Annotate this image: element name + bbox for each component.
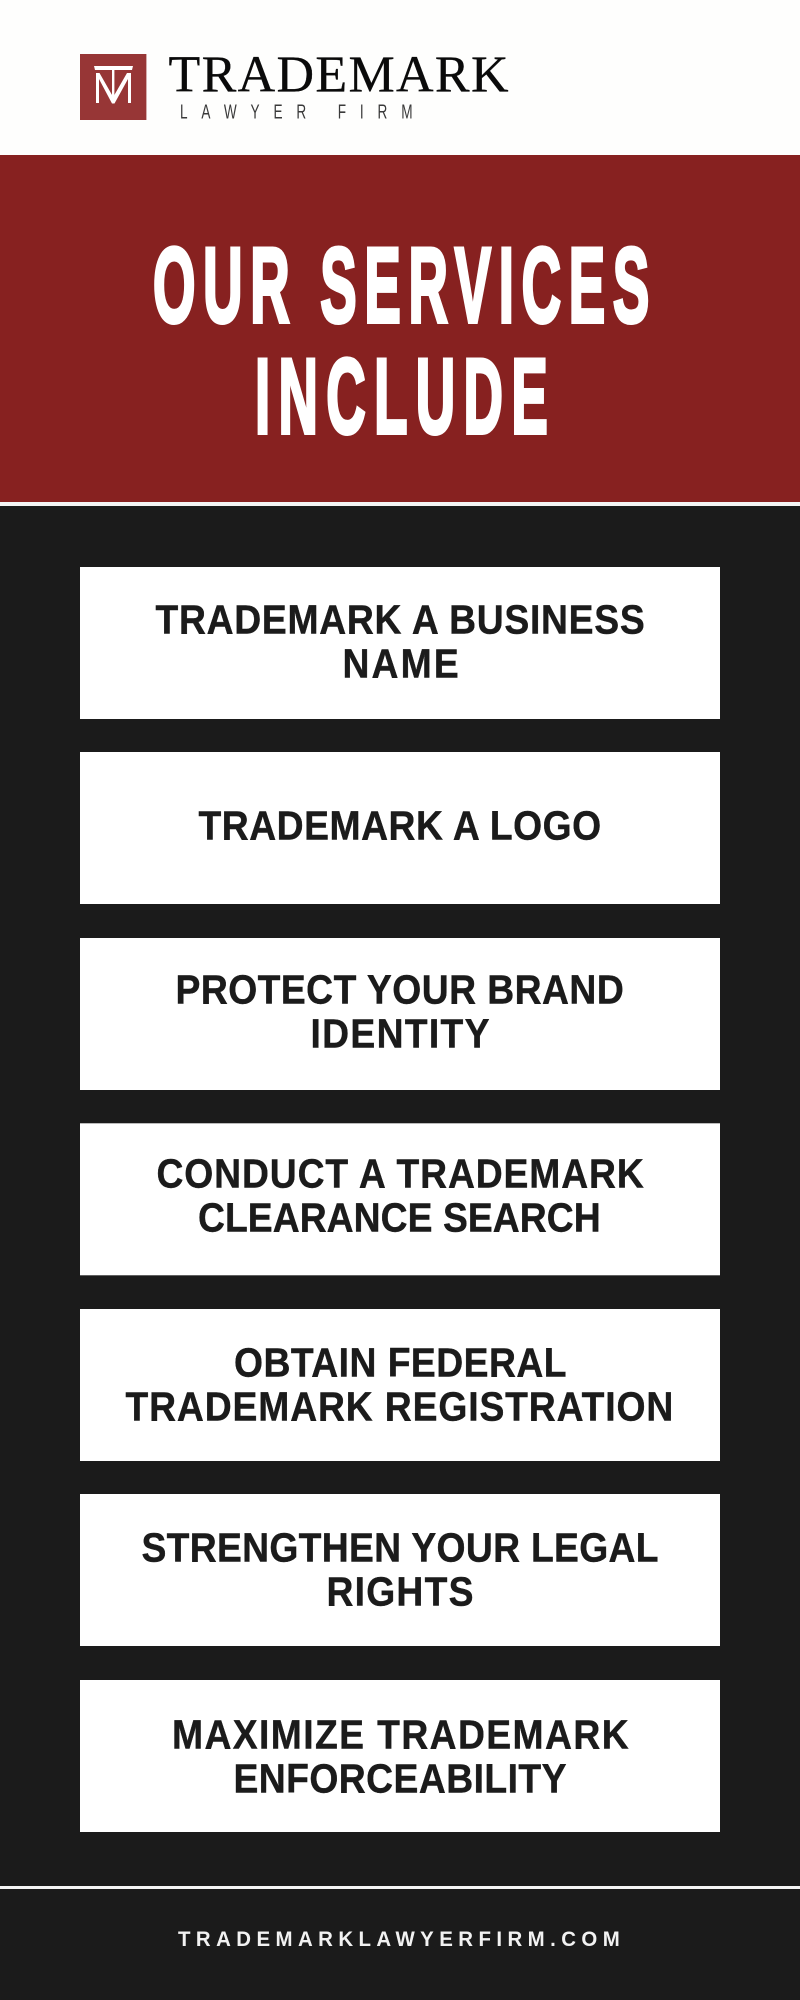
- card text: [176, 968, 624, 1057]
- service card 2: [80, 752, 720, 904]
- card text: IDENTITY: [310, 1012, 489, 1057]
- panel: footer: [0, 1886, 800, 1951]
- service card 5: [80, 1309, 720, 1461]
- card text: RIGHTS: [326, 1570, 473, 1615]
- logo wordmark: [168, 47, 509, 123]
- panel: title banner: [0, 155, 800, 502]
- card text: STRENGTHEN YOUR LEGAL: [142, 1526, 659, 1571]
- service card 1: [80, 567, 720, 719]
- panel: services list: [0, 502, 800, 2000]
- card text: [156, 1152, 644, 1241]
- icon: TM logo mark: [80, 54, 146, 120]
- title: INCLUDE: [255, 336, 548, 456]
- service card 4: [80, 1123, 720, 1275]
- card text: CLEARANCE SEARCH: [198, 1196, 601, 1241]
- service card 3: [80, 938, 720, 1090]
- card text: TRADEMARK A LOGO: [198, 804, 601, 849]
- card text: ENFORCEABILITY: [234, 1757, 566, 1802]
- title: [153, 225, 649, 456]
- card text: [126, 1341, 673, 1430]
- website address: TRADEMARKLAWYERFIRM.COM: [178, 1928, 620, 1951]
- card text: NAME: [342, 642, 459, 687]
- service card 6: [80, 1494, 720, 1646]
- card text: [172, 1713, 629, 1802]
- card text: TRADEMARK A BUSINESS: [156, 598, 645, 643]
- logo name: TRADEMARK: [168, 47, 509, 104]
- card text: PROTECT YOUR BRAND: [176, 968, 624, 1013]
- card text: [156, 598, 645, 687]
- title: OUR SERVICES: [153, 225, 649, 345]
- card text: OBTAIN FEDERAL: [234, 1341, 567, 1386]
- card text: MAXIMIZE TRADEMARK: [172, 1713, 629, 1758]
- logo tagline: LAWYER FIRM: [180, 101, 413, 123]
- card text: TRADEMARK REGISTRATION: [126, 1385, 673, 1430]
- card text: CONDUCT A TRADEMARK: [156, 1152, 644, 1197]
- panel: logo header: [0, 0, 800, 155]
- card text: [142, 1526, 659, 1615]
- service card 7: [80, 1680, 720, 1832]
